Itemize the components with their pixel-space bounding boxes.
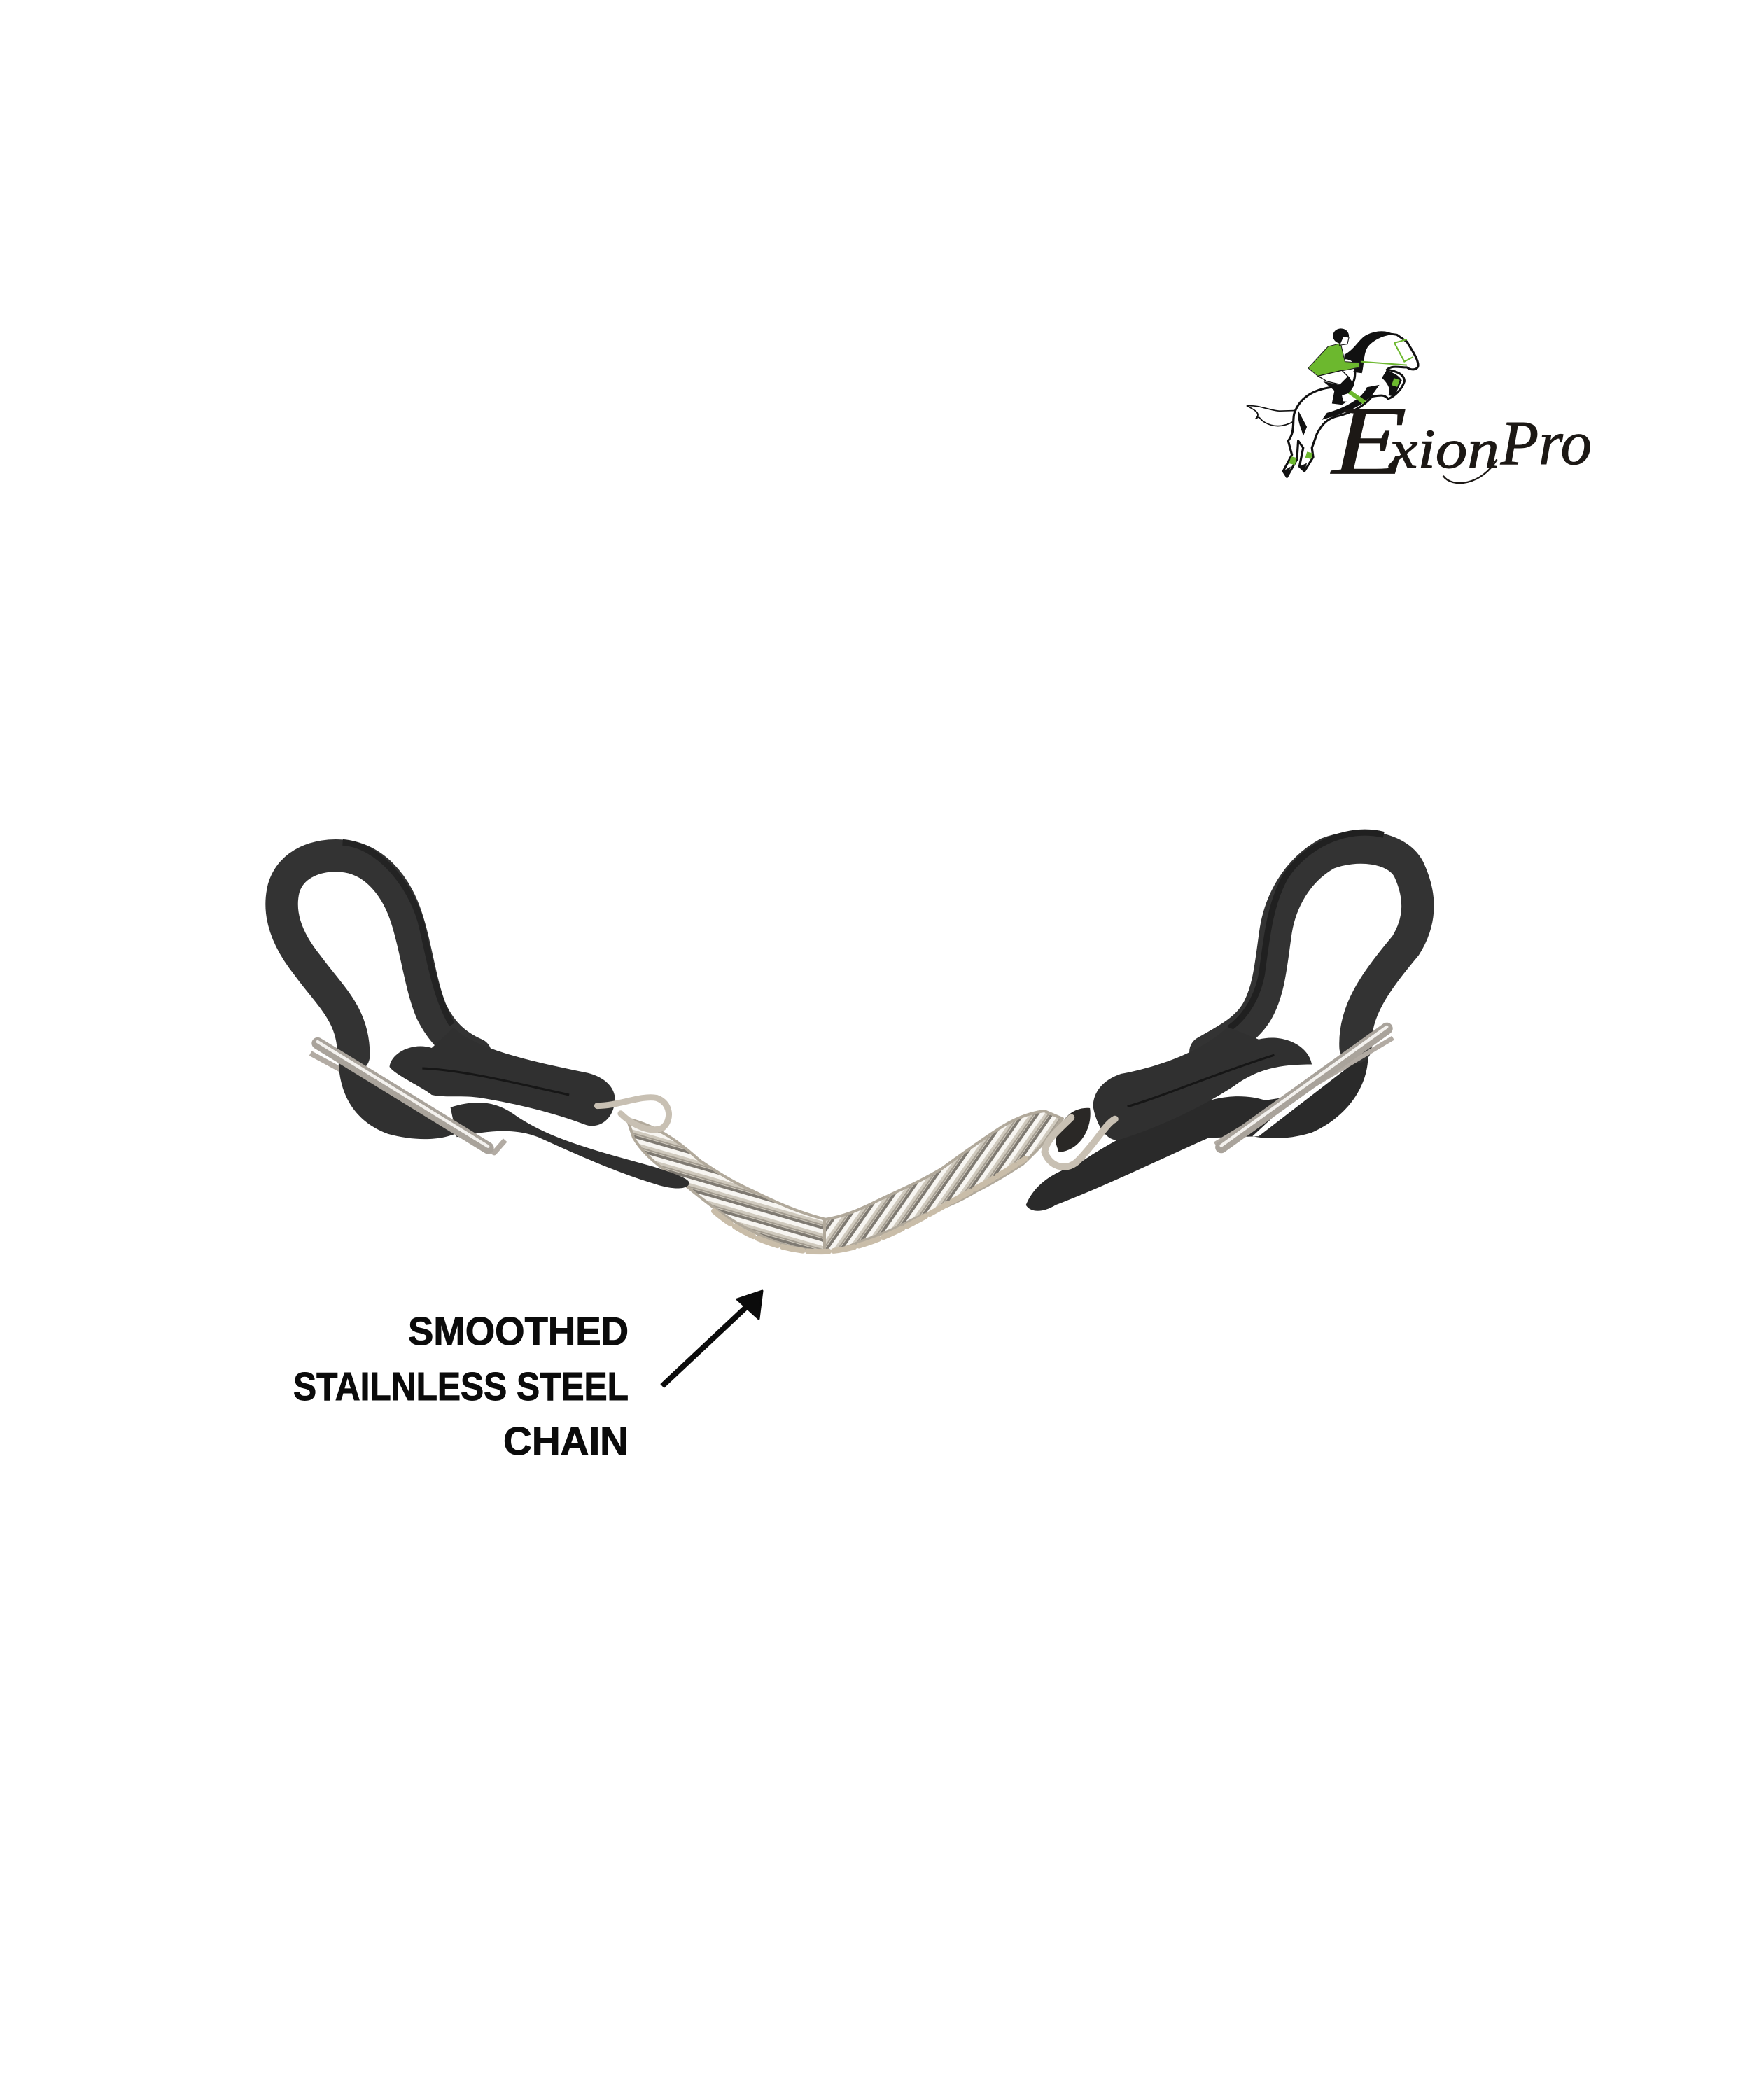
saddle and boot bbox=[1323, 376, 1354, 405]
arrow pointing at chain bbox=[662, 1291, 762, 1386]
left connector ring bbox=[597, 1098, 669, 1130]
right strap body bbox=[1093, 1027, 1312, 1140]
left leather loop bbox=[282, 855, 475, 1056]
horse shading bbox=[1283, 370, 1402, 477]
right buckle bar bbox=[1222, 1028, 1387, 1147]
left strap bbox=[282, 842, 690, 1189]
callout: smoothed stainless steel chain bbox=[293, 1291, 762, 1464]
left loop rim bbox=[343, 842, 452, 1025]
right chain snap bbox=[1056, 1108, 1091, 1152]
right strap flap and tongue bbox=[1026, 1052, 1368, 1211]
callout label: STAILNLESS STEEL bbox=[293, 1364, 629, 1409]
rider breeches bbox=[1318, 370, 1350, 385]
rider helmet bbox=[1333, 328, 1349, 344]
rider face bbox=[1340, 337, 1349, 345]
rider jacket bbox=[1308, 344, 1359, 377]
horse body bbox=[1283, 334, 1418, 477]
callout label: SMOOTHED bbox=[408, 1309, 629, 1354]
callout label: CHAIN bbox=[503, 1419, 629, 1464]
left strap tongue bbox=[451, 1102, 690, 1189]
left strap body bbox=[390, 1028, 615, 1126]
twisted stainless steel chain bbox=[627, 1111, 1063, 1252]
logo: ExionPro bbox=[1247, 328, 1592, 495]
chain lower scalloped edge bbox=[714, 1158, 1026, 1252]
right strap seam bbox=[1128, 1055, 1275, 1107]
green reins bbox=[1361, 340, 1413, 365]
wordmark text: xion bbox=[1388, 418, 1499, 479]
horse tail bbox=[1247, 406, 1294, 426]
right connector ring bbox=[1044, 1117, 1115, 1167]
green girth bbox=[1350, 392, 1364, 402]
wordmark text: E bbox=[1330, 387, 1407, 495]
left buckle back bar bbox=[311, 1054, 505, 1153]
icon: horse and rider bbox=[1247, 328, 1418, 477]
right buckle back bar bbox=[1215, 1038, 1393, 1144]
wordmark text: Pro bbox=[1500, 409, 1592, 478]
wordmark bbox=[1330, 387, 1592, 495]
green leg wraps bbox=[1292, 379, 1397, 464]
right strap bbox=[1026, 832, 1418, 1211]
left buckle bar bbox=[318, 1043, 488, 1148]
left strap flap bbox=[339, 1062, 455, 1139]
right leather loop bbox=[1205, 848, 1418, 1052]
right loop rim bbox=[1229, 832, 1384, 1028]
left strap seam bbox=[422, 1068, 569, 1095]
wordmark swash bbox=[1443, 459, 1497, 483]
product: curb chain with leather straps bbox=[282, 832, 1418, 1252]
chain left half bbox=[627, 1119, 826, 1252]
chain right half bbox=[825, 1111, 1063, 1252]
horse mane bbox=[1345, 331, 1394, 373]
